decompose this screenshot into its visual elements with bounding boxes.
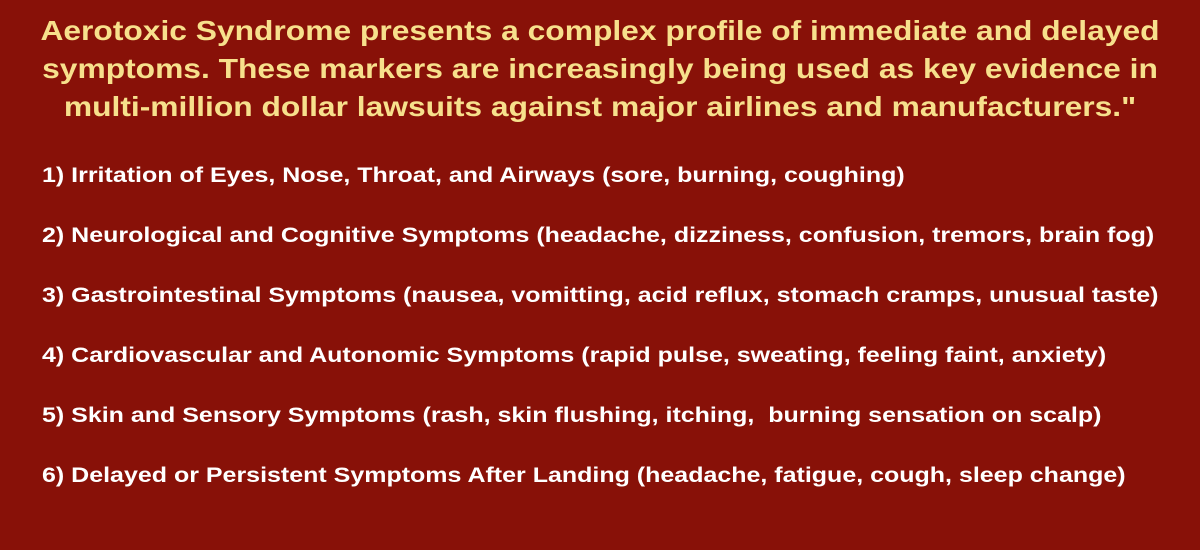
title xyxy=(40,15,1160,122)
item 5: 5) Skin and Sensory Symptoms (rash, skin flushing, itching, burning sensation on scalp) xyxy=(42,404,1101,427)
title: multi-million dollar lawsuits against major airlines and manufacturers." xyxy=(64,91,1136,122)
title: Aerotoxic Syndrome presents a complex profile of immediate and delayed xyxy=(40,15,1160,46)
item 4: 4) Cardiovascular and Autonomic Symptoms (rapid pulse, sweating, feeling faint, anxiety) xyxy=(42,344,1106,367)
title: symptoms. These markers are increasingly being used as key evidence in xyxy=(42,53,1158,84)
item 6: 6) Delayed or Persistent Symptoms After Landing (headache, fatigue, cough, sleep change) xyxy=(42,464,1126,487)
item 3: 3) Gastrointestinal Symptoms (nausea, vomitting, acid reflux, stomach cramps, unusual taste) xyxy=(42,284,1158,307)
symptom list xyxy=(42,164,1158,487)
item 1: 1) Irritation of Eyes, Nose, Throat, and Airways (sore, burning, coughing) xyxy=(42,164,905,187)
item 2: 2) Neurological and Cognitive Symptoms (headache, dizziness, confusion, tremors, brain fog) xyxy=(42,224,1154,247)
